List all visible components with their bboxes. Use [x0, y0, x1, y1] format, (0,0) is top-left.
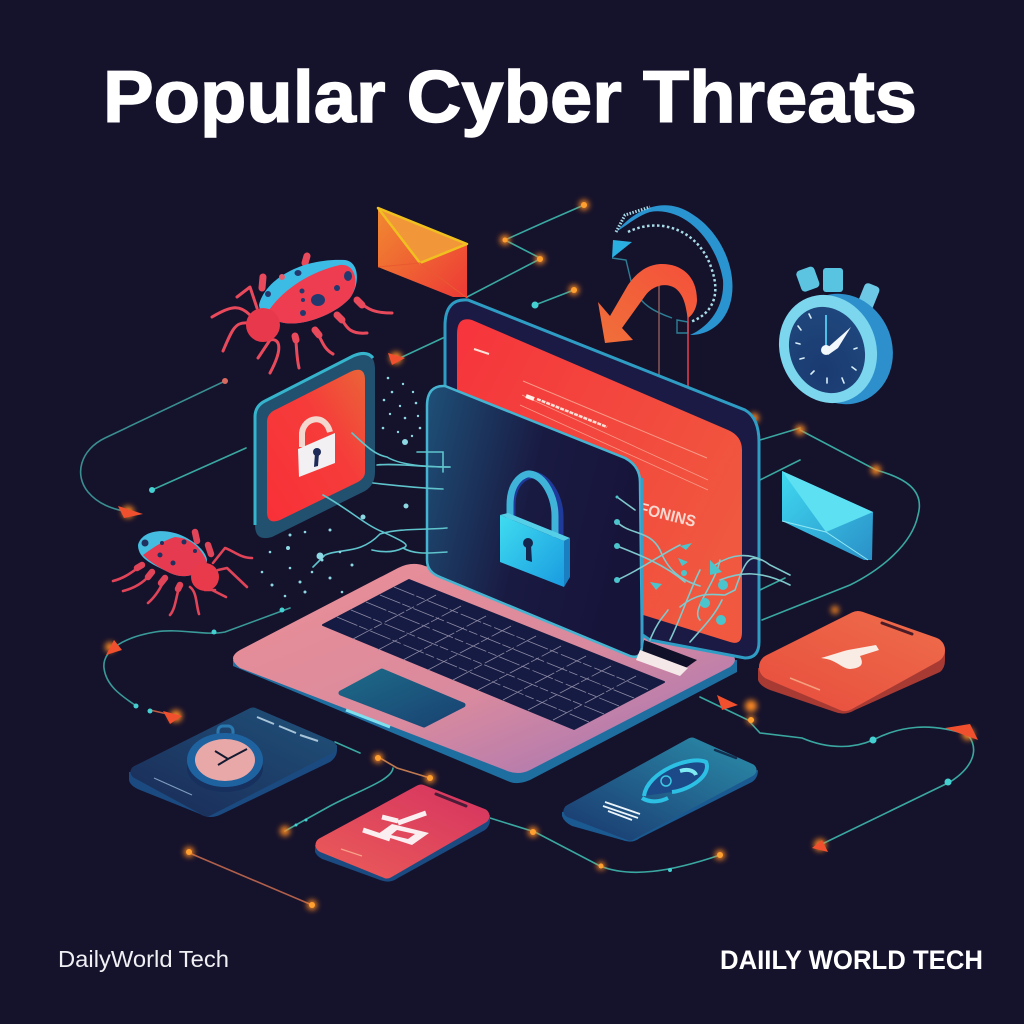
- icon: large bug: [212, 256, 392, 373]
- card: orange phone: [758, 623, 945, 714]
- panel: main screen: [445, 300, 759, 658]
- icon: blue envelope: [782, 471, 873, 560]
- icon: stopwatch: [763, 266, 909, 420]
- icon: circular arrow: [598, 205, 732, 388]
- icon: red phone glyph: [363, 813, 429, 845]
- laptop front latch: [346, 710, 390, 727]
- footer right: DAIILY WORLD TECH: [720, 945, 983, 975]
- network nodes: [105, 200, 978, 910]
- panel: front lock screen: [427, 386, 642, 657]
- icon: white padlock: [298, 419, 335, 477]
- footer left: DailyWorld Tech: [58, 946, 229, 972]
- icon: blue padlock: [500, 474, 570, 587]
- keyboard: [323, 580, 664, 729]
- card: dark device with clock: [129, 714, 337, 817]
- title: Popular Cyber Threats: [103, 57, 917, 138]
- card: red phone: [315, 792, 490, 882]
- icon: orange envelope: [378, 208, 467, 298]
- icon: small slot on keyboard deck: [636, 640, 697, 676]
- laptop base: [233, 564, 737, 783]
- tangled cyan wires: [614, 496, 790, 642]
- screen text: FONINS: [637, 500, 698, 531]
- left wires into screen: [313, 433, 450, 567]
- card: blue phone: [562, 744, 758, 842]
- icon: key glyph: [821, 645, 879, 669]
- icon: pocket watch: [187, 726, 263, 792]
- icon: menu lines: [603, 802, 640, 820]
- scattered data dots: [261, 377, 421, 597]
- network wires: [81, 205, 974, 905]
- icon: small bug: [113, 531, 252, 615]
- trackpad: [341, 671, 463, 725]
- laptop: [233, 564, 737, 783]
- panel: left tablet: [255, 353, 375, 538]
- screen content lines: [474, 349, 708, 490]
- icon: fingerprint glyph: [642, 760, 707, 801]
